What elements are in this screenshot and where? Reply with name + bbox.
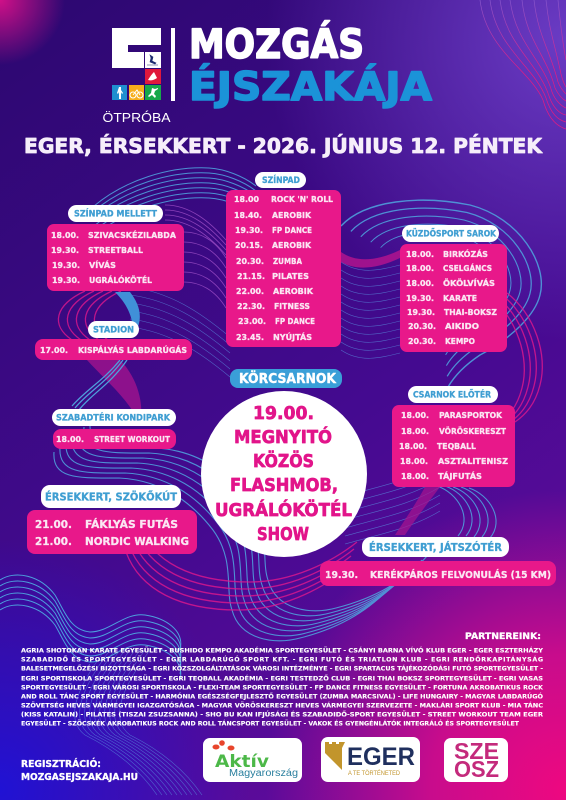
panel: Küzdősport sarok: 18.00. xyxy=(406,264,434,273)
title: Mozgás Éjszakája: MOZGÁS xyxy=(189,20,364,68)
panel: Csarnok előtér: 18.00. xyxy=(401,411,429,420)
panel: Színpad mellett: 19.30. xyxy=(52,276,80,285)
panel: Csarnok előtér: 18.00. xyxy=(401,472,429,481)
panel: Csarnok előtér: PARASPORTOK xyxy=(439,411,503,420)
panel: Színpad mellett: UGRÁLÓKÖTÉL xyxy=(89,274,152,285)
panel: Színpad: FP DANCE xyxy=(272,226,312,235)
panel: Csarnok előtér: 18.00. xyxy=(399,442,427,451)
logo: Eger: A TE TÖRTÉNETED xyxy=(348,770,401,777)
panel: Körcsarnok xyxy=(201,369,367,557)
panel: Színpad: FITNESS xyxy=(274,302,310,311)
panel: Küzdősport sarok: KÜZDŐSPORT SAROK xyxy=(406,228,496,240)
partners list: SPORTEGYESÜLET - EGRI VÁROSI SPORTISKOLA - FLEXI-TEAM SPORTEGYESÜLET - FP DANCE FITNESS EGYESÜLET - FORTUNA AKROBATIKUS ROCK xyxy=(21,682,544,692)
panel: Érsekkert, szökőkút: FÁKLYÁS FUTÁS xyxy=(85,518,178,531)
panel: Küzdősport sarok: KARATE xyxy=(443,294,477,303)
panel: Érsekkert, játszótér: KERÉKPÁROS FELVONULÁS (15 KM) xyxy=(370,569,551,581)
panel: Csarnok előtér: CSARNOK ELŐTÉR xyxy=(413,388,491,400)
icon: red swimmer tile xyxy=(145,69,161,84)
partners list: BALESETMEGELŐZÉSI BIZOTTSÁGA - EGRI KÖZSZOLGÁLTATÁSOK VÁROSI INTÉZMÉNYE - EGRI SPARTACUS TÁJÉKOZÓDÁSI FUTÓ SPORTEGYESÜLET - xyxy=(21,664,543,672)
panel: Színpad: 18.40. xyxy=(234,211,262,220)
panel: Színpad mellett: STREETBALL xyxy=(88,246,143,255)
partners list: AGRIA SHOTOKAN KARATE EGYESÜLET - BUSHIDO KEMPO AKADÉMIA SPORTEGYESÜLET - CSÁNYI BARNA VÍVÓ KLUB EGER - EGER ESZTERHÁZY xyxy=(21,646,543,654)
logo: Aktív Magyarország: Aktív xyxy=(215,752,269,772)
panel: Stadion: STADION xyxy=(93,326,134,336)
panel: Körcsarnok: UGRÁLÓKÖTÉL xyxy=(215,499,352,521)
partners list: (KISS KATALIN) - PILATES (TISZAI ZSUZSANNA) - SHO BU KAN IFJÚSÁGI ÉS SZABADIDŐ-SPORT EGYESÜLET - STREET WORKOUT TEAM EGER xyxy=(21,710,543,718)
panel: Érsekkert, szökőkút: ÉRSEKKERT, SZÖKŐKÚT xyxy=(45,490,177,504)
logo: Aktív Magyarország xyxy=(203,738,302,782)
icon: blue hiker tile xyxy=(112,85,127,100)
panel: Színpad: ZUMBA xyxy=(273,257,303,266)
panel: Színpad: 23.45. xyxy=(236,333,264,342)
panel: Érsekkert, játszótér: ÉRSEKKERT, JÁTSZÓTÉR xyxy=(369,541,502,554)
registration text: MOZGASEJSZAKAJA.HU xyxy=(21,772,138,783)
panel: Érsekkert, szökőkút xyxy=(27,485,197,554)
panel: Színpad mellett: SZÍNPAD MELLETT xyxy=(74,208,157,220)
panel: Körcsarnok: FLASHMOB, xyxy=(230,475,338,496)
panel: Érsekkert, szökőkút: 21.00. xyxy=(35,519,72,531)
panel: Körcsarnok: 19.00. xyxy=(253,403,314,424)
panel: Színpad: AEROBIK xyxy=(272,241,312,250)
panel: Színpad mellett: 19.30. xyxy=(51,246,79,255)
panel: Színpad: 20.15. xyxy=(235,241,263,250)
panel: Csarnok előtér: TÁJFUTÁS xyxy=(438,470,482,481)
heading: place and date: EGER, ÉRSEKKERT - 2026. JÚNIUS 12. PÉNTEK xyxy=(24,134,544,158)
logo: Eger: EGER xyxy=(347,743,415,771)
panel: Küzdősport sarok: 20.30. xyxy=(408,337,436,346)
logo: Aktív Magyarország: Magyarország xyxy=(229,768,298,779)
partners heading: PARTNEREINK: xyxy=(465,632,541,642)
panel: Színpad: SZÍNPAD xyxy=(262,174,300,186)
panel: Színpad: AEROBIK xyxy=(272,211,312,220)
panel: Színpad: ROCK 'N' ROLL xyxy=(271,195,333,204)
title: Mozgás Éjszakája: ÉJSZAKÁJA xyxy=(189,63,432,110)
panel: Érsekkert, játszótér: 19.30. xyxy=(325,570,358,581)
panel: Küzdősport sarok: KEMPO xyxy=(445,337,475,346)
partners list xyxy=(21,646,544,728)
panel: Küzdősport sarok: CSELGÁNCS xyxy=(443,262,492,273)
panel: Szabadtéri kondipark xyxy=(52,409,176,449)
panel: Csarnok előtér: VÖRÖSKERESZT xyxy=(439,426,506,436)
logo: SZE OSZ: SZE xyxy=(454,738,499,764)
panel: Küzdősport sarok xyxy=(400,225,507,352)
icon: skater tile xyxy=(145,52,161,68)
logo: SZE OSZ: OSZ xyxy=(454,756,499,782)
panel: Küzdősport sarok: 18.00. xyxy=(406,250,434,259)
panel: Körcsarnok: KÖZÖS xyxy=(253,450,314,472)
logo: Eger xyxy=(321,737,420,782)
logo: Ötpróba xyxy=(102,28,175,125)
logo divider xyxy=(171,28,175,101)
panel: Stadion: 17.00. xyxy=(40,346,68,355)
panel: Színpad: 22.00. xyxy=(236,287,264,296)
panel: Küzdősport sarok: THAI-BOKSZ xyxy=(444,308,497,317)
panel: Színpad: 18.00 xyxy=(234,195,259,204)
title: Mozgás Éjszakája xyxy=(189,20,432,110)
panel: Érsekkert, szökőkút: NORDIC WALKING xyxy=(85,536,189,548)
panel: Küzdősport sarok: 19.30. xyxy=(406,294,434,303)
panel: Küzdősport sarok: ÖKÖLVÍVÁS xyxy=(443,277,495,288)
panel: Színpad: AEROBIK xyxy=(273,287,314,296)
panel: Színpad: FP DANCE xyxy=(275,317,315,326)
partners list: EGRI SPORTISKOLA SPORTEGYESÜLET - EGRI TEQBALL AKADÉMIA - EGRI TESTEDZŐ CLUB - EGRI THAI BOKSZ SPORTEGYESÜLET - EGRI VASAS xyxy=(21,674,543,682)
panel: Körcsarnok: SHOW xyxy=(257,524,309,545)
panel: Csarnok előtér: ASZTALITENISZ xyxy=(438,457,508,466)
logo caption: ÖTPRÓBA xyxy=(102,110,171,125)
panel: Küzdősport sarok: BIRKÓZÁS xyxy=(443,248,488,259)
icon: yellow cyclist tile xyxy=(129,85,144,100)
panel: Csarnok előtér: TEQBALL xyxy=(437,442,476,451)
panel: Csarnok előtér: 18.00. xyxy=(400,457,428,466)
panel: Színpad: PILATES xyxy=(272,272,309,281)
partners list: SZÖVETSÉG HEVES VÁRMEGYEI IGAZGATÓSÁGA - MAGYAR VÖRÖSKERESZT HEVES VÁRMEGYEI SZERVEZETE - MAKLÁRI SPORT KLUB - MIA TÁNC xyxy=(21,700,543,710)
panel: Színpad: 20.30. xyxy=(236,257,264,266)
logo: SZE OSZ xyxy=(444,738,508,782)
panel: Színpad mellett: SZIVACSKÉZILABDA xyxy=(88,229,177,240)
panel: Érsekkert, szökőkút: 21.00. xyxy=(35,536,72,548)
panel: Színpad mellett: VÍVÁS xyxy=(89,259,116,270)
panel: Csarnok előtér xyxy=(392,386,515,487)
panel: Színpad: 21.15. xyxy=(237,272,265,281)
panel: Stadion xyxy=(35,321,192,360)
panel: Küzdősport sarok: AIKIDO xyxy=(445,322,479,331)
registration text: REGISZTRÁCIÓ: xyxy=(21,757,101,770)
panel: Színpad: 19.30. xyxy=(235,226,263,235)
panel: Szabadtéri kondipark: SZABADTÉRI KONDIPARK xyxy=(56,412,170,424)
partners list: AND ROLL TÁNC SPORT EGYESÜLET - HARMÓNIA EGÉSZSÉGFEJLESZTŐ EGYESÜLET (ZUMBA MARCSIVAL) - LIFE HUNGAIRY - MAGYAR LABDARÚGÓ xyxy=(21,692,544,700)
panel: Érsekkert, játszótér xyxy=(320,537,556,586)
panel: Színpad: NYÚJTÁS xyxy=(273,331,312,342)
partners list: SZABADIDŐ ÉS SPORTEGYESÜLET - EGER LABDARÚGÓ SPORT KFT. - EGRI FUTÓ ÉS TRIATLON KLUB - EGRI RENDŐRKAPITÁNYSÁG xyxy=(21,654,543,664)
panel: Színpad mellett: 18.00. xyxy=(51,231,79,240)
panel: Színpad xyxy=(226,172,341,347)
registration text xyxy=(21,757,138,783)
panel: Szabadtéri kondipark: STREET WORKOUT xyxy=(94,435,170,444)
panel: Körcsarnok: KÖRCSARNOK xyxy=(239,371,337,387)
panel: Színpad: 22.30. xyxy=(237,302,265,311)
panel: Színpad: 23.00. xyxy=(238,317,266,326)
icon: green runner tile xyxy=(145,85,161,100)
panel: Színpad mellett: 19.30. xyxy=(52,261,80,270)
panel: Küzdősport sarok: 20.30. xyxy=(408,322,436,331)
panel: Színpad mellett xyxy=(47,205,184,291)
panel: Stadion: KISPÁLYÁS LABDARÚGÁS xyxy=(78,344,187,355)
panel: Küzdősport sarok: 18.00. xyxy=(406,279,434,288)
partners list: EGYESÜLET - SZÖCSKÉK AKROBATIKUS ROCK AND ROLL TÁNCSPORT EGYESÜLET - VAKOK ÉS GYENGÉNLÁTÓK INTEGRÁLÓ ÉS SPORTEGYESÜLET xyxy=(21,718,520,728)
panel: Szabadtéri kondipark: 18.00. xyxy=(56,435,84,444)
panel: Körcsarnok: MEGNYITÓ xyxy=(234,426,332,448)
panel: Küzdősport sarok: 19.30. xyxy=(407,308,435,317)
panel: Csarnok előtér: 18.00. xyxy=(401,427,429,436)
